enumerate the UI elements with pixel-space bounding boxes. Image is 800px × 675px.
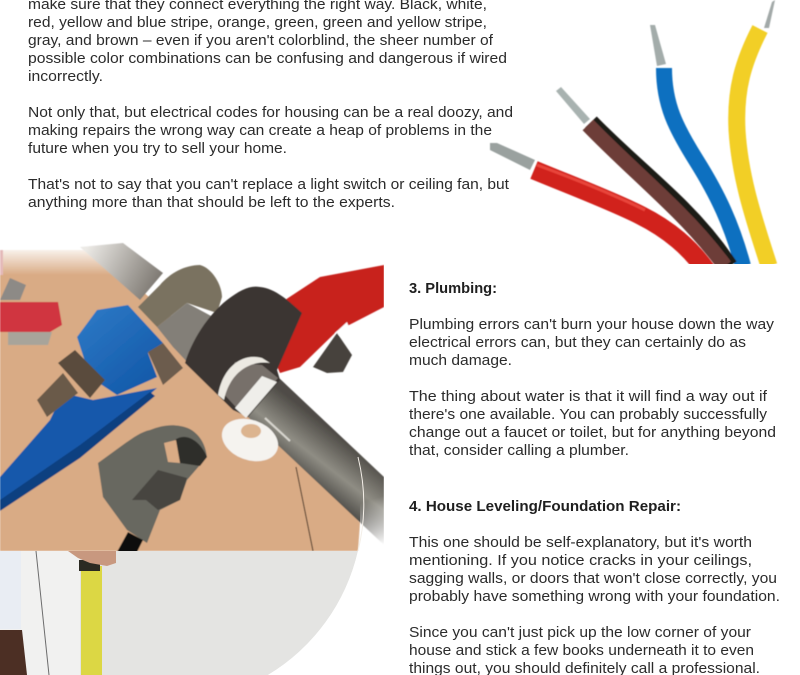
text block: leave it to the experts: That's not to say that you can't replace a light switch or ceiling fan, but: [28, 176, 510, 193]
heading: 3. Plumbing: 3. Plumbing:: [409, 280, 497, 297]
image: electrical wires: [490, 0, 775, 270]
text block: foundation signs: [409, 534, 780, 605]
text block: foundation signs: This one should be self-explanatory, but it's worth: [409, 534, 752, 551]
wrench hole: [335, 322, 350, 337]
text block: water: change out a faucet or toilet, but for anything beyond: [409, 424, 776, 441]
tape roll: [221, 418, 279, 462]
text block: foundation signs: mentioning. If you notice cracks in your ceilings,: [409, 552, 752, 569]
white curve line: [358, 457, 364, 551]
text block: foundation signs: probably have something wrong with your foundation.: [409, 588, 780, 605]
pipe cutter: [98, 425, 207, 552]
blue wrench: [0, 305, 183, 511]
wire: yellow: [737, 0, 775, 266]
text block: electrical intro: [28, 0, 507, 85]
text block: water: that, consider calling a plumber.: [409, 442, 629, 459]
text block: plumbing errors: [409, 316, 775, 369]
wire: red: [490, 143, 706, 270]
text block: electrical intro: possible color combinations can be confusing and dangerous if wired: [28, 50, 507, 67]
red wrench handle: [270, 265, 384, 373]
corner fade: [360, 499, 384, 546]
wall panel with measuring tape: [0, 551, 384, 675]
lower pipe: [248, 377, 384, 545]
text block: plumbing errors: Plumbing errors can't burn your house down the way: [409, 316, 775, 333]
text block: foundation signs: sagging walls, or doors that won't close correctly, you: [409, 570, 777, 587]
measuring tape: [81, 566, 102, 675]
text block: plumbing errors: electrical errors can, but they can certainly do as: [409, 334, 746, 351]
wrench nut: [313, 333, 352, 373]
thin table seam: [296, 467, 313, 551]
text block: call a professional: Since you can't just pick up the low corner of your: [409, 624, 751, 641]
wire: blue: [650, 25, 743, 266]
text block: electrical codes: [28, 104, 513, 157]
text block: leave it to the experts: anything more than that should be left to the experts.: [28, 194, 395, 211]
text block: electrical codes: future when you try to sell your home.: [28, 140, 287, 157]
gray jaw of wrench: [138, 265, 222, 327]
text block: electrical intro: red, yellow and blue stripe, orange, green, green and yellow stripe,: [28, 14, 487, 31]
pipe between wrenches: [157, 303, 213, 365]
joint and white tape: [225, 362, 278, 407]
text block: plumbing errors: much damage.: [409, 352, 512, 369]
text block: water: [409, 388, 776, 459]
text block: electrical intro: incorrectly.: [28, 68, 103, 85]
pipe highlight: [265, 418, 290, 441]
text block: water: The thing about water is that it will find a way out if: [409, 388, 768, 405]
text block: water: there's one available. You can probably successfully: [409, 406, 768, 423]
image: plumbing wrenches: [0, 243, 384, 675]
text block: call a professional: house and stick a few books underneath it to even: [409, 642, 754, 659]
upper pipe: [80, 243, 163, 300]
hand: [68, 551, 116, 566]
red fitting: [0, 250, 62, 345]
wire: brown: [556, 87, 730, 266]
text block: electrical codes: Not only that, but electrical codes for housing can be a real doozy, and: [28, 104, 513, 121]
heading: 4. House Leveling/Foundation Repair: 4. House Leveling/Foundation Repair:: [409, 498, 681, 515]
text block: leave it to the experts: [28, 176, 510, 211]
text block: electrical codes: making repairs the wrong way can create a heap of problems in the: [28, 122, 492, 139]
tabletop: [0, 250, 360, 551]
text block: call a professional: [409, 624, 760, 675]
black wrench head: [185, 287, 302, 417]
text block: electrical intro: gray, and brown – even if you aren't colorblind, the sheer number of: [28, 32, 494, 49]
